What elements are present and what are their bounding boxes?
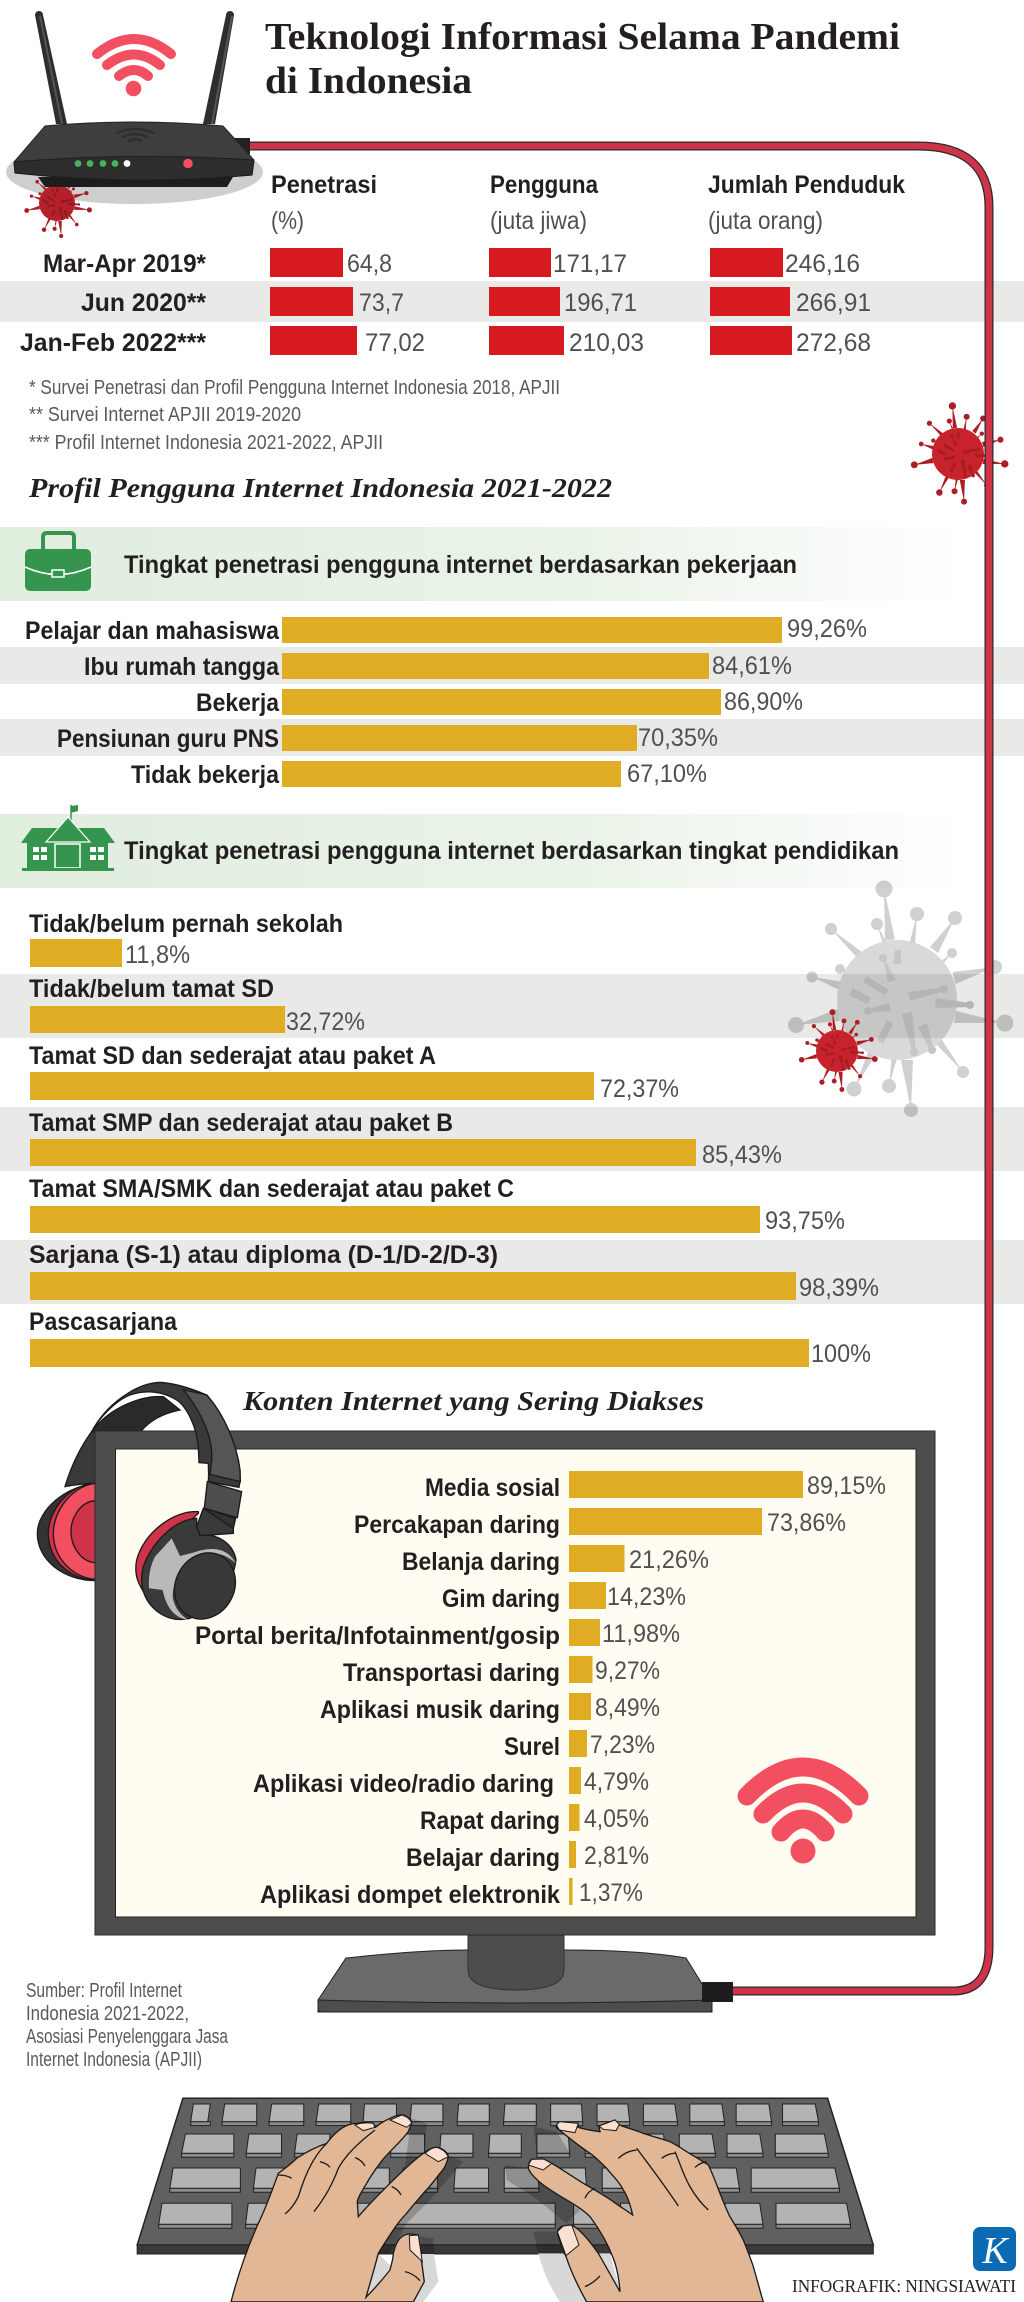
bar chart: konten internet: 21,26% bbox=[629, 1546, 709, 1574]
bar chart: pendidikan: 100% bbox=[811, 1340, 871, 1368]
source note: Asosiasi Penyelenggara Jasa bbox=[26, 2026, 229, 2048]
banner: pekerjaan: Tingkat penetrasi pengguna internet berdasarkan pekerjaan bbox=[124, 551, 797, 579]
icon: headphones back bbox=[37, 1397, 180, 1581]
right hand bbox=[505, 2120, 763, 2302]
bar chart: konten internet: Media sosial bbox=[425, 1474, 560, 1502]
logo: Kompas K bbox=[973, 2227, 1016, 2272]
left hand bbox=[231, 2115, 463, 2302]
bar chart: konten internet: Belajar daring bbox=[406, 1844, 560, 1872]
banner: pendidikan bbox=[0, 805, 965, 888]
table row: Mar-Apr 2019: 246,16 bbox=[785, 250, 860, 278]
table row: Jun 2020: Jun 2020** bbox=[81, 289, 206, 317]
table row: Jan-Feb 2022: 272,68 bbox=[796, 329, 871, 357]
icon: virus right bbox=[911, 402, 1008, 505]
bar chart: pendidikan: 85,43% bbox=[702, 1141, 782, 1169]
table row: Jun 2020: 196,71 bbox=[564, 289, 637, 317]
footnotes: ** Survei Internet APJII 2019-2020 bbox=[29, 404, 301, 426]
bar chart: konten internet: 1,37% bbox=[579, 1879, 643, 1907]
bar chart: pendidikan: Tidak/belum tamat SD bbox=[29, 975, 274, 1003]
bar chart: konten internet: 14,23% bbox=[607, 1583, 686, 1611]
source note bbox=[26, 1980, 229, 2071]
bar chart: pendidikan: 72,37% bbox=[600, 1075, 679, 1103]
source note: Indonesia 2021-2022, bbox=[26, 2003, 189, 2025]
heading: profil pengguna: Profil Pengguna Internet Indonesia 2021-2022 bbox=[28, 473, 612, 503]
bar chart: pendidikan: Tamat SD dan sederajat atau paket A bbox=[29, 1042, 436, 1070]
icon: router with wifi bbox=[6, 11, 263, 238]
bar chart: pekerjaan: 67,10% bbox=[627, 760, 707, 788]
bar chart: konten internet: 89,15% bbox=[807, 1472, 886, 1500]
footnotes bbox=[29, 377, 560, 454]
bar chart: pekerjaan: 86,90% bbox=[724, 688, 803, 716]
table header: Penetrasi: (%) bbox=[271, 207, 304, 235]
bar chart: pendidikan: 32,72% bbox=[286, 1008, 365, 1036]
credit: INFOGRAFIK: NINGSIAWATI bbox=[792, 2276, 1016, 2296]
bar chart: konten internet: Belanja daring bbox=[402, 1548, 560, 1576]
title: di Indonesia bbox=[265, 60, 472, 102]
bar chart: konten internet: 7,23% bbox=[590, 1731, 655, 1759]
icon: large gray virus bbox=[788, 880, 1014, 1117]
icon: briefcase bbox=[25, 533, 91, 591]
table row: Mar-Apr 2019: Mar-Apr 2019* bbox=[43, 250, 206, 278]
bar chart: konten internet: 11,98% bbox=[602, 1620, 680, 1648]
logo: Kompas K: K bbox=[981, 2230, 1009, 2272]
table header: Pengguna: (juta jiwa) bbox=[490, 207, 587, 235]
row bands: pendidikan bbox=[0, 974, 1024, 1304]
title bbox=[265, 16, 900, 102]
bar chart: pendidikan: Tamat SMA/SMK dan sederajat atau paket C bbox=[29, 1175, 514, 1203]
bar chart: pendidikan: Tidak/belum pernah sekolah bbox=[29, 910, 343, 938]
bar chart: pendidikan: Sarjana (S-1) atau diploma (D-1/D-2/D-3) bbox=[29, 1241, 498, 1269]
row band: Jun 2020 bbox=[0, 281, 1024, 322]
heading: konten internet: Konten Internet yang Sering Diakses bbox=[242, 1386, 704, 1416]
table header: Penetrasi bbox=[271, 171, 377, 235]
table row: Jan-Feb 2022 bbox=[20, 326, 871, 357]
monitor bbox=[95, 1431, 935, 2012]
footnotes: *** Profil Internet Indonesia 2021-2022, APJII bbox=[29, 432, 383, 454]
table row: Jun 2020: 73,7 bbox=[359, 289, 404, 317]
bar chart: konten internet: Aplikasi dompet elektronik bbox=[260, 1881, 560, 1909]
icon: small red virus bbox=[799, 1009, 878, 1092]
bar chart: pendidikan: Tamat SMP dan sederajat atau paket B bbox=[29, 1109, 453, 1137]
bar chart: konten internet: 73,86% bbox=[767, 1509, 846, 1537]
footnotes: * Survei Penetrasi dan Profil Pengguna Internet Indonesia 2018, APJII bbox=[29, 377, 560, 399]
bar chart: konten internet: Aplikasi video/radio daring bbox=[253, 1770, 554, 1798]
bar chart: pekerjaan: 84,61% bbox=[712, 652, 792, 680]
icon: wifi bottom bbox=[747, 1767, 859, 1864]
table header: Pengguna: Pengguna bbox=[490, 171, 599, 199]
banner: pekerjaan bbox=[0, 527, 965, 601]
bar chart: pekerjaan: 70,35% bbox=[638, 724, 718, 752]
bar chart: pekerjaan: Bekerja bbox=[196, 689, 280, 717]
table row: Mar-Apr 2019 bbox=[43, 248, 860, 278]
bar chart: konten internet: 4,05% bbox=[584, 1805, 649, 1833]
bar chart: konten internet: 4,79% bbox=[584, 1768, 649, 1796]
bar chart: konten internet: 9,27% bbox=[595, 1657, 660, 1685]
bar chart: konten internet: 2,81% bbox=[584, 1842, 649, 1870]
title: Teknologi Informasi Selama Pandemi bbox=[265, 16, 900, 58]
bar chart: pekerjaan bbox=[25, 615, 867, 789]
icon: school bbox=[21, 805, 115, 871]
bar chart: konten internet: Portal berita/Infotainment/gosip bbox=[195, 1622, 560, 1650]
table row: Jun 2020 bbox=[81, 287, 871, 317]
table header: Jumlah Penduduk: Jumlah Penduduk bbox=[708, 171, 905, 199]
bar chart: pekerjaan: 99,26% bbox=[787, 615, 867, 643]
bar chart: pendidikan: 93,75% bbox=[765, 1207, 845, 1235]
table header: Penetrasi: Penetrasi bbox=[271, 171, 377, 199]
icon: headphones front bbox=[92, 1382, 247, 1630]
table row: Jan-Feb 2022: Jan-Feb 2022*** bbox=[20, 329, 206, 357]
bar chart: pekerjaan: Pensiunan guru PNS bbox=[57, 725, 279, 753]
icon: wifi top bbox=[97, 39, 171, 96]
bar chart: pendidikan: 98,39% bbox=[799, 1274, 879, 1302]
bar chart: konten internet: 8,49% bbox=[595, 1694, 660, 1722]
bar chart: pendidikan: 11,8% bbox=[125, 941, 190, 969]
bar chart: konten internet: Aplikasi musik daring bbox=[320, 1696, 560, 1724]
row bands: pekerjaan bbox=[0, 647, 1024, 756]
bar chart: konten internet: Transportasi daring bbox=[343, 1659, 560, 1687]
bar chart: konten internet: Surel bbox=[504, 1733, 560, 1761]
cable bbox=[250, 146, 989, 2002]
keyboard bbox=[137, 2098, 873, 2254]
table row: Mar-Apr 2019: 64,8 bbox=[347, 250, 392, 278]
table row: Jan-Feb 2022: 210,03 bbox=[569, 329, 644, 357]
bar chart: pekerjaan: Pelajar dan mahasiswa bbox=[25, 617, 280, 645]
table header: Jumlah Penduduk bbox=[708, 171, 905, 235]
bar chart: pendidikan bbox=[29, 910, 879, 1368]
bar chart: pekerjaan: Ibu rumah tangga bbox=[84, 653, 280, 681]
banner: pendidikan: Tingkat penetrasi pengguna internet berdasarkan tingkat pendidikan bbox=[124, 837, 899, 865]
source note: Sumber: Profil Internet bbox=[26, 1980, 182, 2002]
bar chart: konten internet: Percakapan daring bbox=[354, 1511, 560, 1539]
source note: Internet Indonesia (APJII) bbox=[26, 2049, 202, 2071]
bar chart: konten internet bbox=[195, 1471, 886, 1909]
bar chart: konten internet: Rapat daring bbox=[420, 1807, 560, 1835]
table row: Mar-Apr 2019: 171,17 bbox=[553, 250, 627, 278]
icon: router virus bbox=[24, 167, 92, 238]
bar chart: pendidikan: Pascasarjana bbox=[29, 1308, 178, 1336]
table row: Jan-Feb 2022: 77,02 bbox=[365, 329, 425, 357]
bar chart: pekerjaan: Tidak bekerja bbox=[131, 761, 280, 789]
table header: Jumlah Penduduk: (juta orang) bbox=[708, 207, 823, 235]
table header: Pengguna bbox=[490, 171, 599, 235]
bar chart: konten internet: Gim daring bbox=[442, 1585, 560, 1613]
table row: Jun 2020: 266,91 bbox=[796, 289, 871, 317]
